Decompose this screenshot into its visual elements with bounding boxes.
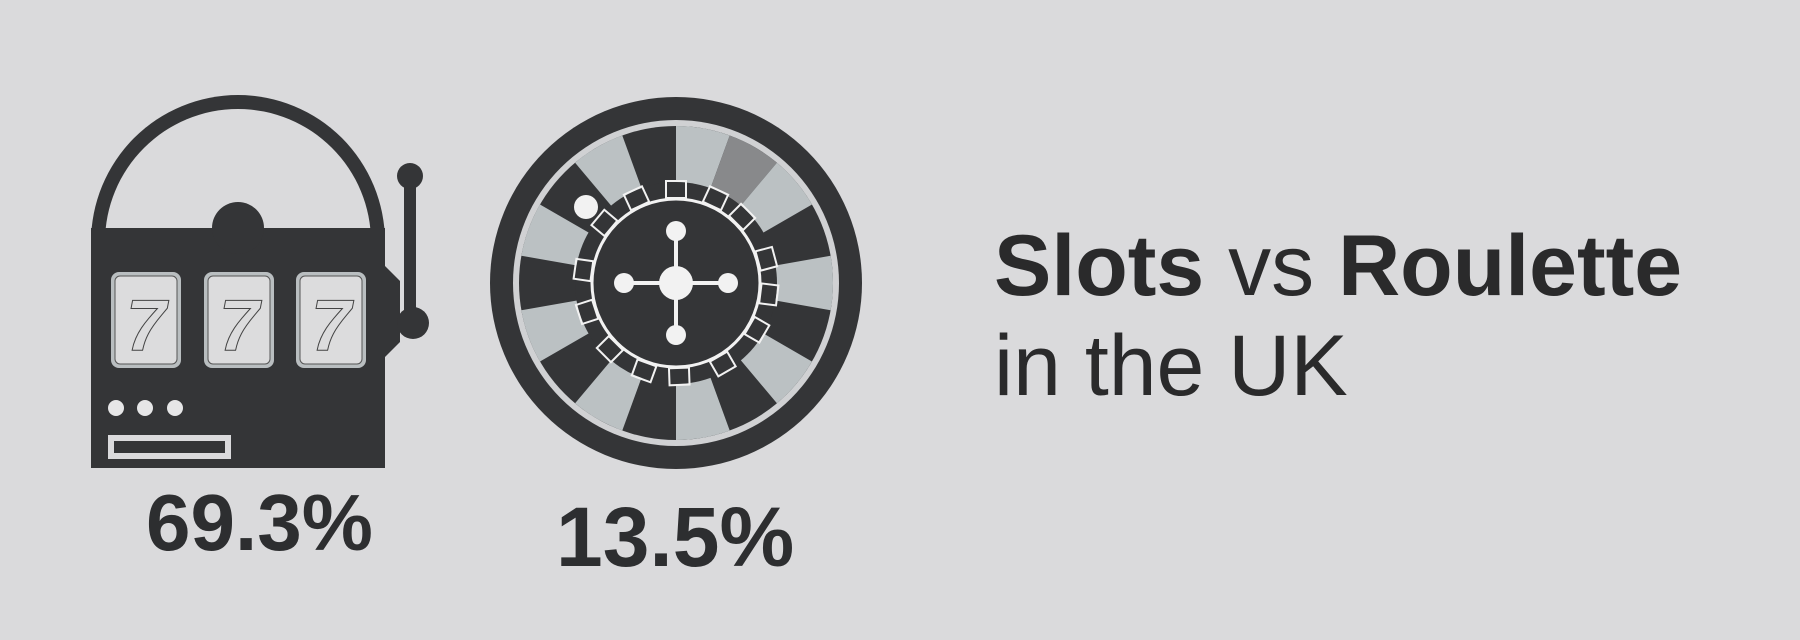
icon: roulette wheel bbox=[490, 97, 862, 469]
title: Slots vs Roulette bbox=[994, 218, 1682, 314]
stat: slots: 69.3% bbox=[146, 478, 373, 567]
subtitle: in the UK bbox=[994, 318, 1348, 414]
stat: roulette: 13.5% bbox=[556, 490, 794, 584]
reels: 7 bbox=[219, 286, 262, 366]
reels: 7 bbox=[311, 286, 354, 366]
reels bbox=[111, 272, 366, 368]
lever bbox=[384, 163, 429, 358]
cross bbox=[614, 221, 738, 345]
reels: 7 bbox=[126, 286, 169, 366]
pockets bbox=[574, 181, 778, 385]
icon: slot machine bbox=[91, 95, 429, 468]
